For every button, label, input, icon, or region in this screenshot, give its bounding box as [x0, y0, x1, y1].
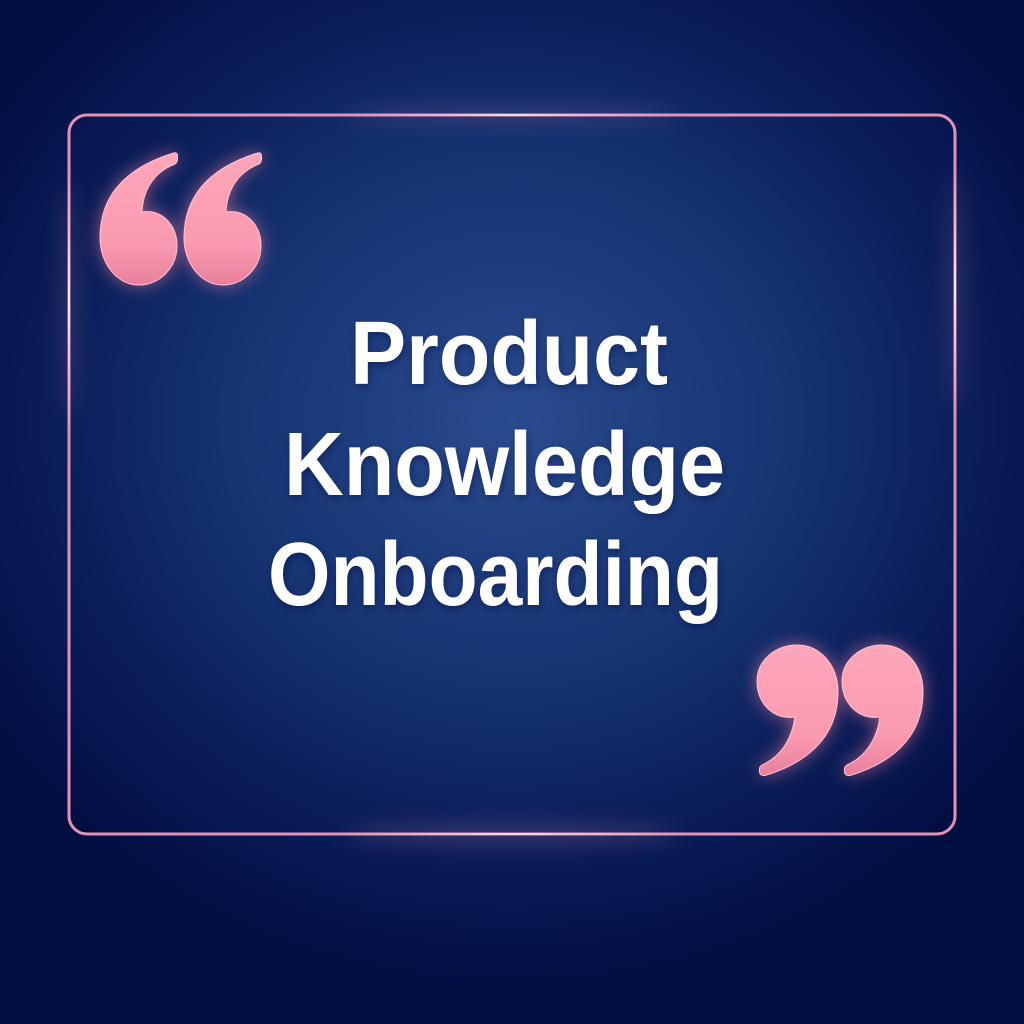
icon: closing quotation mark	[757, 645, 923, 776]
title: Knowledge	[284, 415, 725, 515]
title: Onboarding	[268, 525, 723, 625]
title	[268, 304, 725, 625]
icon: opening quotation mark	[100, 153, 262, 285]
title: Product	[350, 304, 668, 404]
panel: quote frame	[62, 108, 962, 841]
